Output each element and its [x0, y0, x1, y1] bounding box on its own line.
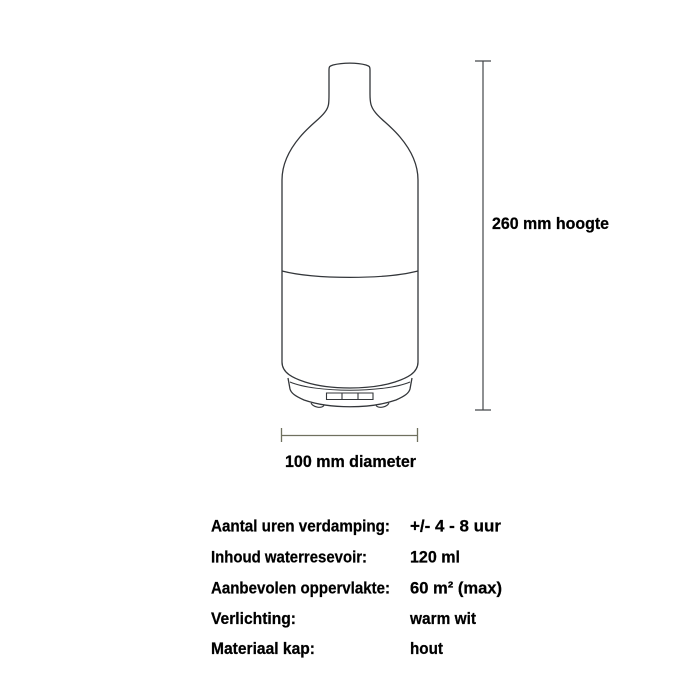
row: water reservoir	[211, 548, 460, 566]
row: evaporation hours: Aantal uren verdamping:	[211, 518, 390, 536]
row: lighting: Verlichting:	[211, 610, 296, 628]
bottle seam	[282, 271, 418, 277]
row: recommended surface: Aanbevolen oppervlakte:	[211, 580, 390, 598]
specifications table	[211, 518, 502, 658]
row: evaporation hours	[211, 518, 502, 536]
row: hood material: hout	[410, 640, 443, 658]
row: lighting: warm wit	[409, 610, 476, 628]
diameter label: 100 mm diameter	[285, 453, 417, 471]
row: recommended surface	[211, 580, 502, 598]
row: water reservoir: 120 ml	[410, 548, 460, 566]
diameter dimension line	[282, 428, 418, 442]
base ring	[288, 378, 412, 407]
row: lighting	[211, 610, 476, 628]
bottle body outline	[282, 63, 418, 388]
row: evaporation hours: +/- 4 - 8 uur	[410, 518, 502, 536]
row: recommended surface: 60 m² (max)	[410, 580, 502, 598]
height dimension line	[475, 61, 491, 410]
icon: diffuser bottle	[282, 63, 418, 407]
row: hood material	[211, 640, 443, 658]
row: hood material: Materiaal kap:	[211, 640, 315, 658]
row: water reservoir: Inhoud waterresevoir:	[211, 548, 367, 566]
height label: 260 mm hoogte	[492, 215, 609, 233]
right foot	[376, 403, 389, 407]
base inner line	[290, 382, 410, 390]
left foot	[311, 403, 324, 407]
control buttons	[326, 393, 373, 400]
